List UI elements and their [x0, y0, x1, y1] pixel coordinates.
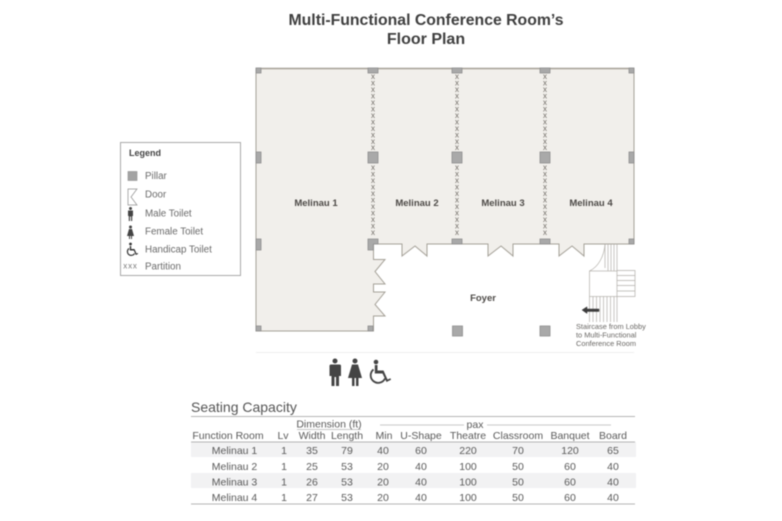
- partition: Melinau 1 and 2: x: [371, 137, 375, 146]
- column headers: Width: [299, 430, 326, 442]
- partition: Melinau 2 and 3: x: [455, 228, 459, 237]
- partition: Melinau 3 and 4: x: [543, 104, 547, 114]
- partition: Melinau 2 and 3: x: [455, 208, 459, 218]
- row: Melinau 2: 20: [377, 461, 389, 473]
- partition: Melinau 2 and 3: x: [455, 124, 459, 133]
- partition: Melinau 3 and 4: x: [543, 222, 547, 230]
- partition: Melinau 3 and 4: x: [543, 78, 547, 88]
- room labels: Melinau 1: [294, 198, 338, 209]
- row: Melinau 1: 60: [415, 445, 427, 457]
- partition: Melinau 2 and 3: x: [455, 202, 459, 211]
- row: Melinau 4: 60: [564, 492, 576, 504]
- row: Melinau 4: [212, 492, 619, 504]
- partition: Melinau 2 and 3: x: [455, 104, 459, 114]
- row: Melinau 3: Melinau 3: [212, 476, 257, 488]
- row: Melinau 3: 40: [607, 476, 619, 488]
- row: Melinau 3: 50: [512, 476, 524, 488]
- row: Melinau 3: 26: [306, 476, 318, 488]
- partition: Melinau 3 and 4: x: [543, 118, 547, 126]
- row: Melinau 3: 1: [281, 476, 287, 488]
- partition: Melinau 3 and 4: x: [543, 111, 547, 120]
- column headers: Banquet: [550, 430, 590, 442]
- row: Melinau 1: 1: [281, 445, 287, 457]
- partition: Melinau 1 and 2: x: [371, 163, 375, 172]
- row bands: [191, 442, 636, 457]
- partition: Melinau 2 and 3: x: [455, 163, 459, 172]
- partition: Melinau 2 and 3: x: [455, 118, 459, 126]
- legend: [120, 142, 240, 276]
- row: Melinau 2: 60: [564, 461, 576, 473]
- partition: Melinau 1 and 2: x: [371, 196, 375, 204]
- partition: Melinau 1 and 2: x: [371, 143, 375, 152]
- legend: male toilet: Male Toilet: [145, 208, 192, 220]
- partition: Melinau 2 and 3: x: [455, 143, 459, 152]
- room labels: Foyer: [470, 293, 496, 304]
- partition: Melinau 3 and 4: x: [543, 163, 547, 172]
- partition: Melinau 1 and 2: x: [371, 78, 375, 88]
- partition: Melinau 1 and 2: x: [371, 170, 375, 178]
- toilet icons: [330, 358, 391, 386]
- row: Melinau 3: 53: [341, 476, 353, 488]
- partition: Melinau 3 and 4: x: [543, 215, 547, 224]
- row: Melinau 2: 25: [306, 461, 318, 473]
- partition: Melinau 1 and 2: x: [371, 202, 375, 211]
- arrow: [582, 307, 599, 314]
- partition: Melinau 1 and 2: x: [371, 176, 375, 185]
- row: Melinau 4: 1: [281, 492, 287, 504]
- legend: partition: Partition: [145, 262, 181, 272]
- legend: door: Door: [145, 190, 167, 200]
- partition: Melinau 3 and 4: x: [543, 143, 547, 152]
- room labels: Melinau 4: [569, 198, 613, 209]
- seating capacity table: pax: [467, 419, 484, 431]
- column headers: Board: [599, 430, 627, 442]
- room labels: [294, 198, 613, 304]
- partition: Melinau 1 and 2: x: [371, 72, 375, 81]
- legend: partition: xxx: [123, 262, 138, 270]
- legend: female toilet: Female Toilet: [145, 226, 203, 238]
- partition: Melinau 3 and 4: x: [543, 92, 547, 100]
- staircase label: Conference Room: [576, 339, 636, 348]
- column headers: U-Shape: [400, 430, 442, 442]
- partition: Melinau 2 and 3: x: [455, 189, 459, 198]
- row: Melinau 1: 35: [306, 445, 318, 457]
- row: Melinau 1: [212, 445, 619, 457]
- row: Melinau 4: 50: [512, 492, 524, 504]
- partition: Melinau 1 and 2: x: [371, 92, 375, 100]
- room labels: Melinau 3: [481, 198, 525, 209]
- partition: Melinau 2 and 3: x: [455, 72, 459, 81]
- partition: Melinau 2 and 3: x: [455, 111, 459, 120]
- partition: Melinau 2 and 3: x: [455, 170, 459, 178]
- column headers: Min: [376, 430, 393, 442]
- staircase: [590, 244, 635, 322]
- partition: Melinau 2 and 3: x: [455, 78, 459, 88]
- column headers: Classroom: [493, 430, 543, 442]
- legend heading: Legend: [129, 148, 161, 158]
- partition: Melinau 3 and 4: x: [543, 72, 547, 81]
- top wall emphasis: [256, 68, 634, 70]
- partition: Melinau 2 and 3: x: [455, 98, 459, 107]
- title: [288, 12, 564, 48]
- partition: Melinau 1 and 2: x: [371, 189, 375, 198]
- row: Melinau 4: 100: [459, 492, 477, 504]
- row: Melinau 1: 40: [377, 445, 389, 457]
- partition: Melinau 3 and 4: x: [543, 208, 547, 218]
- group headers: Dimension (ft): [296, 418, 362, 430]
- row: Melinau 3: 20: [377, 476, 389, 488]
- partition: Melinau 1 and 2: x: [371, 222, 375, 230]
- staircase label: to Multi-Functional: [576, 330, 637, 340]
- partition: Melinau 2 and 3: x: [455, 92, 459, 100]
- partition: Melinau 3 and 4: x: [543, 124, 547, 133]
- row: Melinau 1: 79: [341, 445, 353, 457]
- row: Melinau 3: 40: [415, 476, 427, 488]
- partition: Melinau 1 and 2: x: [371, 104, 375, 114]
- room labels: Melinau 2: [395, 198, 439, 209]
- title: Floor Plan: [387, 31, 465, 48]
- partition: Melinau 1 and 2: x: [371, 182, 375, 192]
- legend: partition: [123, 262, 181, 272]
- partition: Melinau 2 and 3: x: [455, 215, 459, 224]
- column headers: Function Room: [192, 430, 264, 442]
- partition: Melinau 2 and 3: x: [455, 137, 459, 146]
- column headers: [192, 430, 627, 442]
- row: Melinau 3: [212, 476, 619, 488]
- partition: Melinau 3 and 4: x: [543, 170, 547, 178]
- partition: Melinau 3 and 4: x: [543, 85, 547, 94]
- partition: Melinau 1 and 2: x: [371, 98, 375, 107]
- partition: Melinau 1 and 2: x: [371, 208, 375, 218]
- table rules: [191, 416, 635, 504]
- row: Melinau 2: [212, 461, 619, 473]
- room floor with walls: [256, 68, 634, 331]
- column headers: Theatre: [450, 430, 486, 442]
- partition: Melinau 3 and 4: x: [543, 137, 547, 146]
- partition: Melinau 2 and 3: x: [455, 130, 459, 140]
- row: Melinau 3: 100: [459, 476, 477, 488]
- partition: Melinau 1 and 2: x: [371, 130, 375, 140]
- column headers: Lv: [277, 430, 289, 442]
- row: Melinau 2: 40: [607, 461, 619, 473]
- partition: Melinau 3 and 4: x: [543, 228, 547, 237]
- row: Melinau 4: 40: [415, 492, 427, 504]
- partition: Melinau 3 and 4: x: [543, 189, 547, 198]
- row: Melinau 1: 70: [512, 445, 524, 457]
- partition: Melinau 2 and 3: x: [455, 176, 459, 185]
- partition: Melinau 2 and 3: x: [455, 85, 459, 94]
- partition: Melinau 1 and 2: x: [371, 85, 375, 94]
- row: Melinau 2: Melinau 2: [212, 461, 257, 473]
- partition: Melinau 3 and 4: x: [543, 182, 547, 192]
- row: Melinau 2: 50: [512, 461, 524, 473]
- row: Melinau 2: 40: [415, 461, 427, 473]
- partition: Melinau 3 and 4: x: [543, 176, 547, 185]
- partition: Melinau 1 and 2: x: [371, 124, 375, 133]
- row: Melinau 2: 53: [341, 461, 353, 473]
- row: Melinau 4: 27: [306, 492, 318, 504]
- seating capacity table: [191, 416, 636, 504]
- partition: Melinau 3 and 4: x: [543, 196, 547, 204]
- icon: male toilet: [330, 358, 341, 386]
- partition: Melinau 1 and 2: x: [371, 111, 375, 120]
- partition: Melinau 3 and 4: x: [543, 202, 547, 211]
- row: Melinau 3: 60: [564, 476, 576, 488]
- partition: Melinau 1 and 2: x: [371, 215, 375, 224]
- staircase label: [576, 322, 646, 348]
- partition: Melinau 3 and 4: x: [543, 98, 547, 107]
- title: Multi-Functional Conference Room’s: [288, 12, 564, 29]
- row: Melinau 4: 53: [341, 492, 353, 504]
- partition: Melinau 2 and 3: [455, 72, 459, 237]
- row: Melinau 1: Melinau 1: [212, 445, 257, 457]
- legend: pillar: Pillar: [145, 171, 168, 182]
- row: Melinau 4: 40: [607, 492, 619, 504]
- partition: Melinau 1 and 2: x: [371, 228, 375, 237]
- floor plan: [256, 68, 646, 348]
- partition: Melinau 2 and 3: x: [455, 182, 459, 192]
- partition: Melinau 1 and 2: [371, 72, 375, 237]
- partition: Melinau 2 and 3: x: [455, 222, 459, 230]
- row: Melinau 4: Melinau 4: [212, 492, 257, 504]
- row: Melinau 2: 1: [281, 461, 287, 473]
- icon: female toilet: [348, 358, 362, 386]
- seating capacity heading: Seating Capacity: [191, 399, 297, 415]
- row: Melinau 4: 20: [377, 492, 389, 504]
- partition: Melinau 3 and 4: [543, 72, 547, 237]
- divider: [256, 352, 634, 354]
- partition: Melinau 1 and 2: x: [371, 118, 375, 126]
- column headers: Length: [331, 430, 363, 442]
- partition: Melinau 3 and 4: x: [543, 130, 547, 140]
- icon: wheelchair toilet: [371, 360, 391, 383]
- pillars: [256, 68, 634, 336]
- row: Melinau 2: 100: [459, 461, 477, 473]
- row: Melinau 1: 220: [459, 445, 477, 457]
- legend: handicap toilet: Handicap Toilet: [145, 244, 212, 256]
- row: Melinau 1: 65: [607, 445, 619, 457]
- staircase label: Staircase from Lobby: [576, 322, 646, 331]
- partition: Melinau 2 and 3: x: [455, 196, 459, 204]
- row: Melinau 1: 120: [561, 445, 579, 457]
